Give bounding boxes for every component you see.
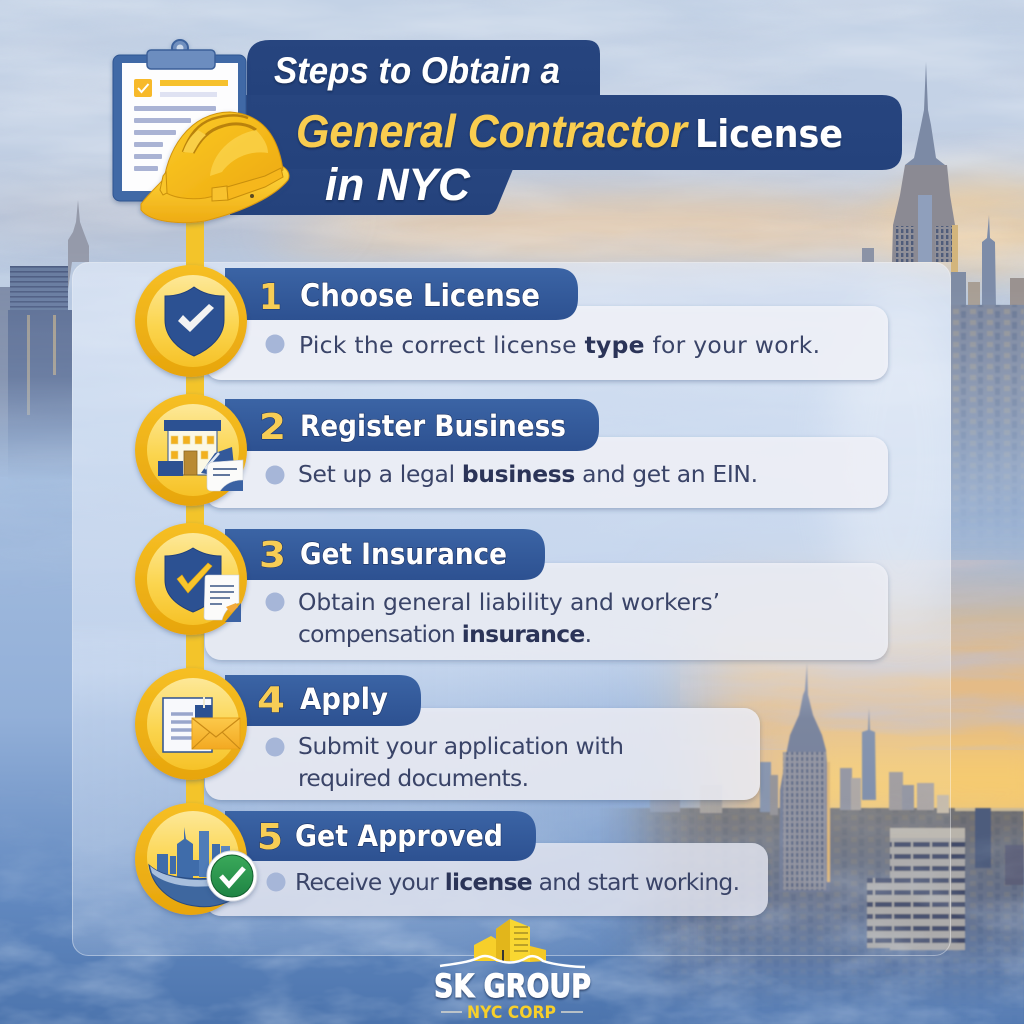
body text line 2: required documents. [298, 764, 529, 792]
icon: document and envelope [135, 668, 247, 780]
title text line 3: in NYC [325, 159, 471, 210]
icon: shield check [135, 265, 247, 377]
title text line 2 highlight: General Contractor [296, 105, 689, 157]
heading bar: step 2 [225, 399, 599, 451]
logo: SK Group NYC Corp [434, 919, 591, 1023]
timeline connector [186, 218, 204, 828]
heading text: Get Approved: Get Approved [295, 819, 503, 853]
bullet [266, 466, 284, 484]
icon: hard hat [141, 112, 289, 223]
heading text: Get Insurance: Get Insurance [300, 537, 507, 571]
card: step 3 [205, 563, 888, 660]
step 5 [135, 803, 768, 916]
bullet [266, 738, 284, 756]
icon: clipboard [113, 40, 246, 201]
bullet [266, 334, 284, 354]
card: step 1 [205, 306, 888, 380]
bullet [266, 592, 284, 612]
step 1 [135, 265, 888, 380]
number 1: 1 [259, 277, 282, 318]
body text: Set up a legal business and get an EIN. [298, 460, 758, 488]
card: step 2 [205, 437, 888, 508]
step 2 [135, 394, 888, 508]
body text line 1: Submit your application with [298, 732, 624, 760]
body text line 2: compensation insurance. [298, 620, 592, 648]
top right skyline [862, 62, 1024, 565]
number 3: 3 [259, 535, 286, 576]
number 2: 2 [259, 407, 286, 448]
logo name: SK GROUP [434, 967, 591, 1005]
body text: Receive your license and start working. [295, 868, 740, 896]
step 3 [135, 523, 888, 660]
logo buildings [440, 919, 585, 967]
logo subname: NYC CORP [467, 1003, 556, 1023]
heading bar: step 3 [225, 529, 545, 580]
lower cityscape [600, 663, 1024, 1024]
title text line 1: Steps to Obtain a [274, 50, 560, 91]
number 4: 4 [257, 680, 285, 721]
heading text: Choose License: Choose License [300, 278, 540, 314]
bullet [266, 872, 286, 892]
body text line 1: Obtain general liability and workers’ [298, 588, 720, 616]
icon: shield and policy [135, 523, 247, 635]
heading bar: step 4 [225, 675, 421, 726]
card: step 4 [205, 708, 760, 800]
number 5: 5 [257, 817, 283, 858]
icon: city bowl with green check [135, 803, 257, 915]
left skyline [0, 200, 89, 480]
translucent main panel [72, 262, 970, 956]
body text: Pick the correct license type for your work. [299, 331, 820, 359]
icon: building and document [135, 394, 247, 506]
title banner [230, 40, 902, 215]
heading text: Register Business: Register Business [300, 409, 566, 443]
title text line 2 end: License [695, 112, 843, 156]
heading text: Apply: Apply [300, 682, 388, 716]
step 4 [135, 668, 760, 800]
heading bar: step 1 [225, 268, 578, 320]
card: step 5 [205, 843, 768, 916]
heading bar: step 5 [225, 811, 536, 861]
